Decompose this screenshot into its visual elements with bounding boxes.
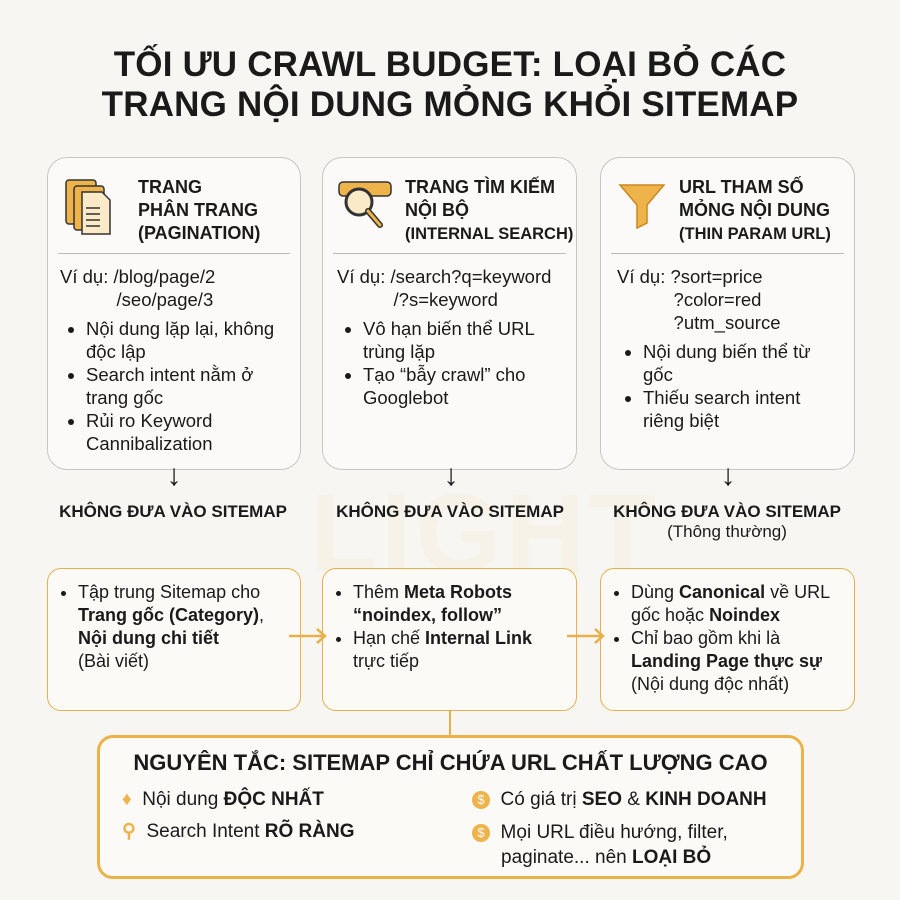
title: TRANG NỘI DUNG MỎNG KHỎI SITEMAP: [102, 85, 798, 124]
arrow: right 2: [567, 628, 605, 644]
label: not in sitemap 3: (Thông thường): [667, 522, 787, 541]
item: intent: ⚲ Search Intent RÕ RÀNG: [122, 821, 355, 842]
panel: solution 2: [322, 568, 577, 711]
watermark: LIGHT: [310, 472, 660, 595]
panel: solution 1: Nội dung chi tiết: [78, 628, 219, 648]
text: examples: Tạo “bẫy crawl” cho Googlebot: [363, 364, 525, 408]
title: TỐI ƯU CRAWL BUDGET: LOẠI BỎ CÁC: [114, 45, 786, 84]
text: examples: Vô hạn biến thể URL trùng lặp: [363, 318, 534, 362]
text: examples: [337, 266, 551, 408]
panel: solution 1: (Bài viết): [78, 651, 149, 671]
arrow: down 1: ↓: [166, 459, 182, 492]
item: remove: Mọi URL điều hướng, filter,: [501, 822, 728, 843]
text: examples: Nội dung lặp lại, không độc lập: [86, 318, 274, 362]
item: unique: ♦ Nội dung ĐỘC NHẤT: [122, 789, 324, 810]
panel: solution 2: Hạn chế Internal Link trực tiếp: [353, 628, 532, 671]
heading: TRANG: [138, 177, 202, 197]
heading: [138, 177, 260, 243]
item: seo value: Có giá trị SEO & KINH DOANH: [501, 789, 767, 810]
text: examples: Ví dụ: /blog/page/2: [60, 266, 215, 287]
arrow: down 2: ↓: [444, 459, 458, 492]
text: examples: ?utm_source: [674, 312, 780, 333]
item: seo value: $: [477, 792, 485, 807]
label: not in sitemap 1: KHÔNG ĐƯA VÀO SITEMAP: [59, 502, 287, 521]
heading: (THIN PARAM URL): [679, 225, 831, 243]
text: examples: /seo/page/3: [117, 289, 213, 310]
text: examples: Rủi ro Keyword Cannibalization: [86, 410, 213, 454]
panel: principle: [97, 735, 804, 879]
text: examples: Ví dụ: /search?q=keyword: [337, 266, 551, 287]
title: [102, 44, 798, 124]
icon: documents: [65, 179, 111, 235]
panel: internal search: [322, 157, 577, 470]
label: not in sitemap 3: [613, 502, 841, 541]
icon: funnel: [618, 184, 666, 230]
panel: solution 1: Tập trung Sitemap cho Trang gốc (Category),: [78, 582, 264, 625]
item: remove: $: [477, 825, 485, 840]
panel: solution 3: Dùng Canonical về URL gốc hoặc Noindex: [631, 582, 829, 625]
heading: [679, 176, 831, 243]
panel: solution 2: Thêm Meta Robots “noindex, follow”: [353, 582, 512, 625]
text: examples: ?color=red: [674, 289, 761, 310]
arrow: right 1: [289, 628, 327, 644]
heading: (PAGINATION): [138, 223, 260, 243]
text: examples: Search intent nằm ở trang gốc: [86, 364, 253, 408]
label: not in sitemap 3: KHÔNG ĐƯA VÀO SITEMAP: [613, 502, 841, 521]
panel: solution 3: [600, 568, 855, 711]
text: examples: Thiếu search intent riêng biệt: [643, 387, 800, 431]
heading: PHÂN TRANG: [138, 200, 258, 220]
heading: [405, 176, 573, 243]
panel: pagination: [47, 157, 301, 470]
text: examples: [60, 266, 274, 454]
icon: search: [338, 181, 392, 228]
text: examples: [617, 266, 811, 431]
text: examples: /?s=keyword: [394, 289, 498, 310]
heading: NỘI BỘ: [405, 200, 469, 220]
text: examples: Ví dụ: ?sort=price: [617, 266, 763, 287]
heading: NGUYÊN TẮC: SITEMAP CHỈ CHỨA URL CHẤT LƯỢNG CAO: [133, 750, 768, 775]
heading: MỎNG NỘI DUNG: [679, 200, 830, 220]
heading: TRANG TÌM KIẾM: [405, 177, 555, 197]
heading: (INTERNAL SEARCH): [405, 225, 573, 243]
text: examples: Nội dung biến thể từ gốc: [643, 341, 811, 385]
item: remove: paginate... nên LOẠI BỎ: [501, 847, 711, 868]
panel: thin param: [600, 157, 855, 470]
panel: solution 1: [47, 568, 301, 711]
label: not in sitemap 2: KHÔNG ĐƯA VÀO SITEMAP: [336, 502, 564, 521]
panel: solution 3: Chỉ bao gồm khi là Landing Page thực sự (Nội dung độc nhất): [631, 628, 822, 694]
item: remove: [472, 822, 728, 868]
arrow: down 3: ↓: [720, 459, 736, 492]
heading: URL THAM SỐ: [679, 177, 804, 197]
